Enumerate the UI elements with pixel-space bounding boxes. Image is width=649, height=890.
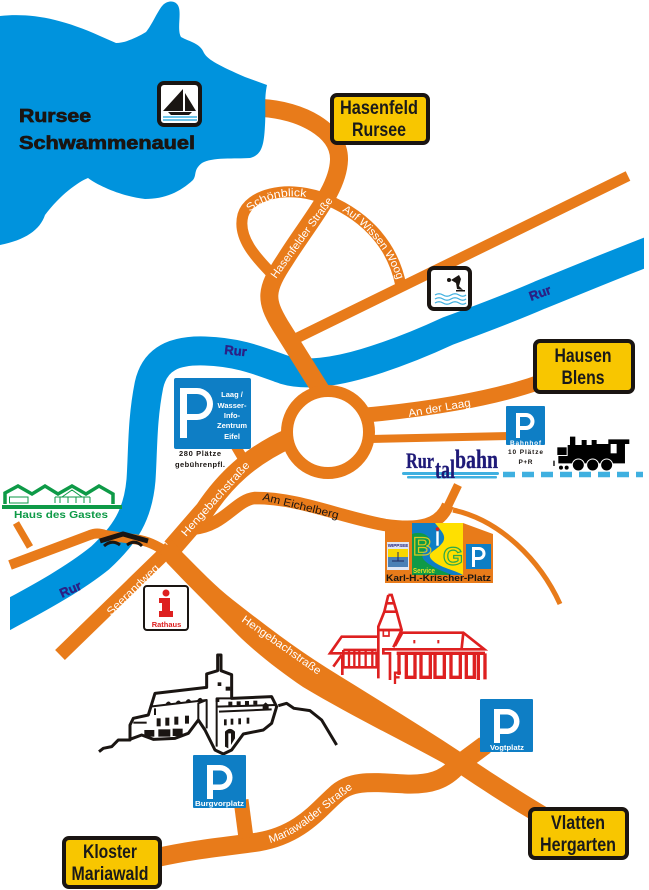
river labels [57, 282, 553, 601]
parking: Vogtplatz: Vogtplatz [490, 743, 524, 752]
road: Seerandweg [60, 548, 170, 655]
road: Am Eichelberg [192, 498, 448, 529]
parking: Krischer-Platz [466, 544, 491, 569]
road: diagonal to the northeast [297, 176, 628, 338]
BIG Service logo: Service [413, 566, 435, 575]
road: to Burgvorplatz [241, 800, 246, 838]
BIG Service logo: B [413, 533, 432, 561]
river labels: Rur [527, 282, 553, 304]
church [330, 595, 485, 684]
road: An der Laag [366, 382, 540, 415]
parking: Laag Wasser-Info-Zentrum: gebührenpfl. [175, 460, 225, 469]
lake label: Rursee [19, 106, 91, 126]
Rurtalbahn logo: tal [435, 455, 455, 484]
road labels: Mariawalder Straße [268, 784, 352, 843]
sign: Kloster Mariawald: Mariawald [72, 863, 148, 885]
river labels: Rur [224, 342, 248, 359]
BIG Service logo: G [443, 543, 463, 571]
icon: sailing [159, 83, 200, 125]
road labels: Hasenfelder Straße [269, 195, 335, 281]
parking: Burgvorplatz: Burgvorplatz [195, 799, 244, 808]
river labels: Rur [57, 578, 84, 601]
sign: Vlatten Hergarten [530, 809, 627, 858]
Karl-H.-Krischer-Platz block: Karl-H.-Krischer-Platz [386, 573, 492, 583]
road labels: Am Eichelberg [261, 491, 340, 522]
icon: Rathaus information: Rathaus [152, 620, 181, 629]
road labels: Auf Wissen Woog [342, 206, 402, 280]
road: Hengebachstraße north [172, 438, 290, 548]
sign: Vlatten Hergarten: Hergarten [540, 834, 616, 856]
road: to Bahnhof [370, 436, 510, 439]
road: Mariawalder Straße [155, 745, 485, 858]
road: to Rurtalbahn [446, 485, 458, 510]
road: Hengebachstraße south [160, 540, 560, 828]
parking: Laag Wasser-Info-Zentrum: 280 Plätze [179, 449, 221, 458]
road labels: Seerandweg [105, 562, 162, 618]
sign: Kloster Mariawald: Kloster [83, 841, 137, 863]
road labels [105, 188, 499, 843]
Rurtalbahn logo: Rur [406, 448, 434, 473]
parking: Laag Wasser-Info-Zentrum: Zentrum [217, 421, 247, 430]
road labels: An der Laag [407, 397, 472, 420]
road labels: Hengebachstraße [239, 614, 323, 677]
Haus des Gastes: Haus des Gastes [14, 509, 108, 521]
parking: Vogtplatz [480, 699, 533, 752]
icon: locomotive [553, 437, 629, 471]
icon: Rathaus information [144, 586, 188, 630]
Haus des Gastes [2, 486, 122, 521]
parking: Burgvorplatz [193, 755, 246, 808]
icon: bridge [100, 534, 148, 546]
sign: Hausen Blens [535, 341, 633, 392]
road: stub to Laag parking [235, 445, 245, 462]
sign: Hasenfeld Rursee: Rursee [352, 119, 406, 141]
lake label [19, 106, 195, 153]
parking: Laag Wasser-Info-Zentrum [174, 378, 251, 469]
lake Rursee [0, 2, 267, 245]
parking: Laag Wasser-Info-Zentrum: Info- [224, 411, 241, 420]
road labels: Hengebachstraße [179, 460, 252, 539]
sign: Hasenfeld Rursee [332, 95, 428, 143]
parking: Laag Wasser-Info-Zentrum: Eifel [224, 432, 240, 441]
road: Auf Wissen Woog and Schönblick loop [242, 192, 401, 286]
sign: Vlatten Hergarten: Vlatten [551, 812, 605, 834]
parking: Bahnhof: Bahnhof [510, 440, 542, 447]
road: west to Haus des Gastes [10, 534, 172, 565]
sign: Hausen Blens: Hausen [554, 345, 612, 367]
road labels: Schönblick [246, 188, 306, 210]
lake label: Schwammenauel [19, 133, 195, 153]
river Rur [0, 247, 649, 619]
parking: Laag Wasser-Info-Zentrum: Laag / [221, 390, 244, 399]
parking: Bahnhof: P+R [518, 459, 533, 466]
railway dashes [503, 472, 643, 477]
Rurtalbahn logo: bahn [455, 445, 498, 474]
sign: Hausen Blens: Blens [562, 367, 605, 389]
road: branch to Haus des Gastes [16, 523, 30, 547]
Karl-H.-Krischer-Platz block [385, 523, 493, 583]
Rurtalbahn logo [402, 445, 499, 484]
roundabout [287, 391, 369, 473]
sign: Hasenfeld Rursee: Hasenfeld [340, 97, 418, 119]
castle [99, 655, 337, 754]
road: curve east [453, 510, 560, 604]
parking: Bahnhof [506, 406, 545, 466]
sign: Kloster Mariawald [64, 838, 160, 887]
BIG Service logo [412, 523, 463, 575]
icon: swimming [429, 268, 470, 309]
road: Hasenfelder Straße [262, 108, 339, 392]
parking: Laag Wasser-Info-Zentrum: Wasser- [218, 401, 247, 410]
parking: Bahnhof: 10 Plätze [508, 449, 543, 456]
WIPPSEE logo: WIPPSEE [388, 543, 408, 548]
